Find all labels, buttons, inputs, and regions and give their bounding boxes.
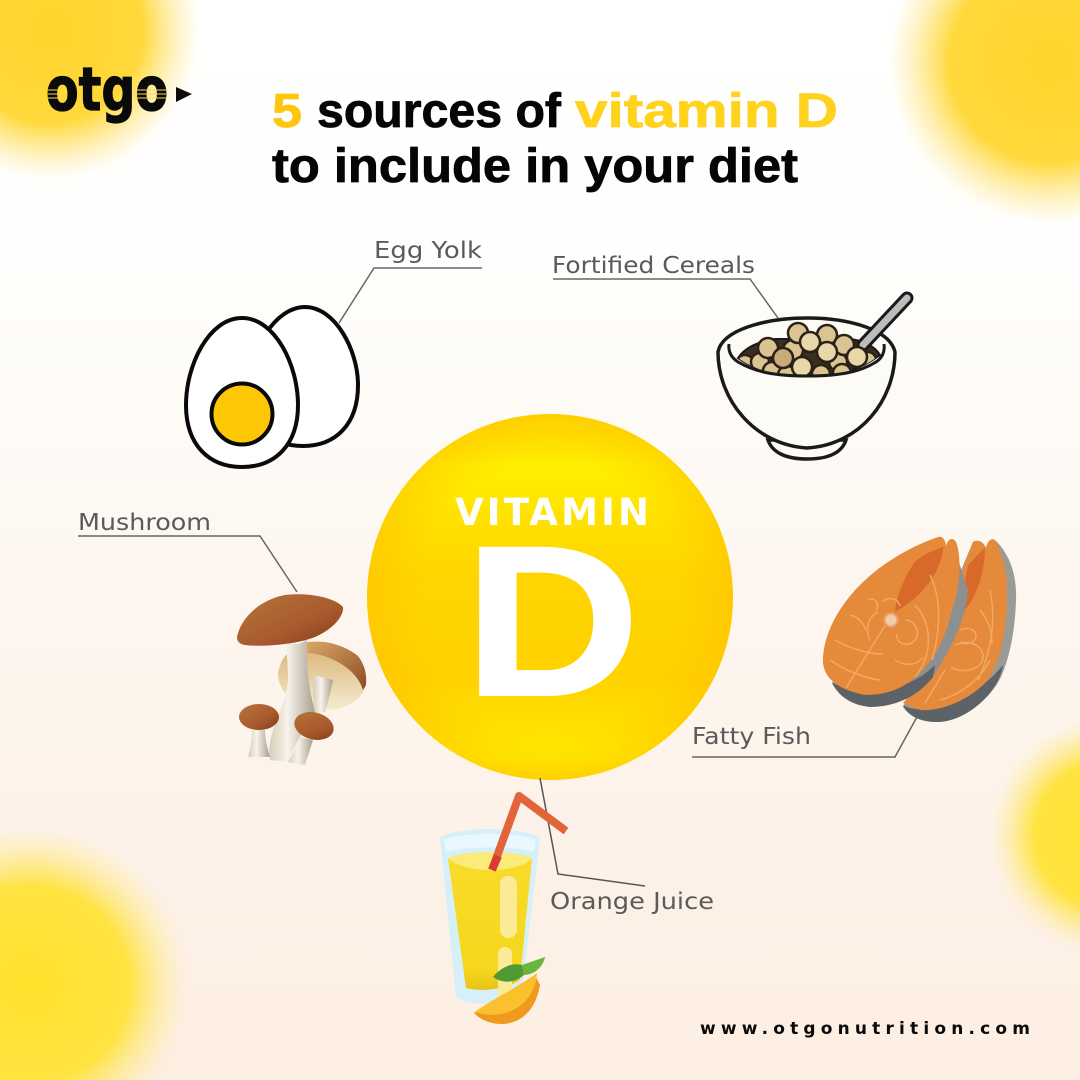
blurred yellow circle top-right [888, 0, 1080, 224]
label: Fatty Fish [692, 715, 918, 757]
central sphere: Vitamin D: D [464, 502, 640, 741]
title: sources of [317, 85, 562, 138]
icon: cereal bowl [718, 298, 907, 459]
label: Egg Yolk [339, 238, 483, 323]
icon: salmon steaks [823, 537, 1016, 722]
logo: otgo: otgo [46, 55, 168, 125]
blurred yellow circle right [990, 717, 1080, 953]
icon: eggs [186, 307, 358, 467]
icon: mushrooms [237, 594, 366, 765]
title: vitamin D [575, 85, 838, 138]
title [272, 85, 838, 193]
label: Orange Juice: Orange Juice [550, 889, 714, 915]
icon: glass of juice with lemon [440, 796, 566, 1024]
label: Fortified Cereals [552, 253, 778, 318]
label: Fatty Fish: Fatty Fish [692, 724, 811, 750]
label: Fortified Cereals: Fortified Cereals [552, 253, 755, 279]
label: Mushroom [78, 510, 297, 592]
central sphere: Vitamin D: VITAMIN [455, 491, 649, 534]
blurred yellow circle top-left [0, 0, 200, 180]
website: www.otgonutrition.com [700, 1019, 1030, 1039]
label: Orange Juice [540, 778, 714, 915]
title: to include in your diet [272, 140, 798, 193]
central sphere: Vitamin D [367, 414, 733, 780]
title: 5 [272, 85, 302, 138]
blurred yellow circle bottom-left [0, 827, 188, 1080]
label: Mushroom: Mushroom [78, 510, 211, 536]
label: Egg Yolk: Egg Yolk [374, 238, 483, 264]
